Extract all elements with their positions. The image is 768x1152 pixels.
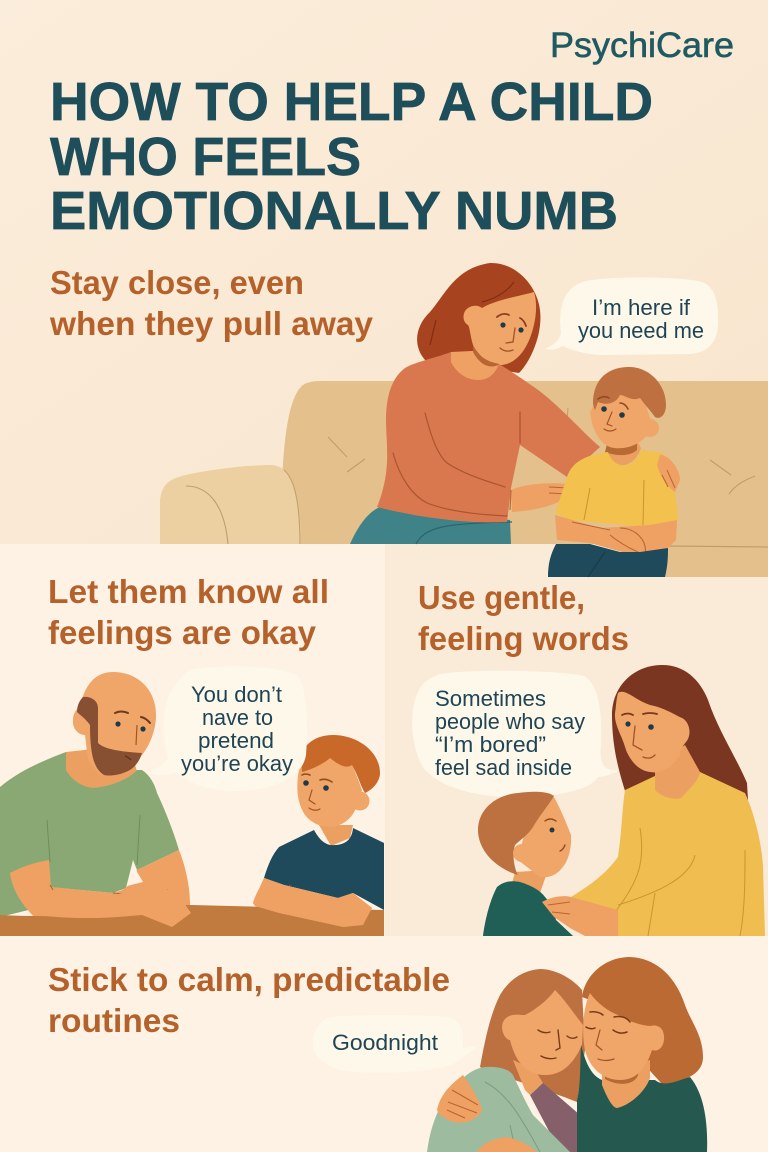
- speech bubble: sometimes people: [412, 671, 618, 797]
- mother in teal: [577, 957, 707, 1152]
- speech bubble: goodnight: [313, 1015, 478, 1073]
- heading: let them know: [48, 573, 329, 651]
- panel: calm routines: [48, 957, 707, 1152]
- speech bubble: sometimes people: people who say: [435, 709, 585, 734]
- speech bubble: goodnight: Goodnight: [332, 1030, 438, 1055]
- sofa: [160, 381, 768, 577]
- heading: stay close: [49, 264, 374, 342]
- heading: let them know: feelings are okay: [48, 614, 317, 651]
- speech bubble: I'm here if you need me: you need me: [578, 318, 704, 343]
- panel: let them know: [0, 573, 384, 936]
- speech bubble: sometimes people: Sometimes: [435, 686, 546, 711]
- title: HOW TO HELP A CHILD: [50, 72, 653, 132]
- panel: use gentle words: [412, 579, 765, 936]
- speech bubble: I'm here if you need me: [545, 277, 718, 355]
- heading: use gentle: Use gentle,: [418, 579, 585, 616]
- boy's forearm on table: [253, 878, 372, 927]
- gap between man's arm and body: [127, 865, 143, 886]
- brand logo: PsychiCare: [550, 26, 734, 65]
- boy in yellow shirt: [548, 367, 680, 577]
- speech bubble: I'm here if you need me: I’m here if: [592, 295, 691, 320]
- speech bubble: you don't have to pretend: you’re okay: [181, 751, 293, 776]
- woman in yellow sweater: [571, 665, 765, 936]
- man's hands on table: [37, 890, 191, 927]
- speech bubble: you don't have to pretend: You don’t: [191, 682, 282, 707]
- heading: stick to routines: [48, 961, 450, 1039]
- man in green shirt: [0, 672, 191, 927]
- heading: use gentle: [418, 579, 629, 657]
- heading: stay close: when they pull away: [49, 305, 374, 342]
- boy in green shirt: [478, 792, 573, 936]
- heading: stay close: Stay close, even: [50, 264, 304, 301]
- heading: stick to routines: Stick to calm, predictable: [48, 961, 450, 998]
- heading: use gentle: feeling words: [418, 620, 629, 657]
- heading: let them know: Let them know all: [48, 573, 329, 610]
- title: EMOTIONALLY NUMB: [50, 181, 618, 241]
- panel: stay close: [49, 263, 768, 577]
- title: WHO FEELS: [50, 127, 361, 187]
- page background: [0, 0, 768, 544]
- speech bubble: you don't have to pretend: [148, 666, 307, 791]
- heading: stick to routines: routines: [48, 1002, 180, 1039]
- panel 3 background: [385, 544, 768, 936]
- panel 4 background: [0, 936, 768, 1152]
- boy in navy shirt: [253, 735, 384, 927]
- woman in orange sweater: [350, 263, 600, 544]
- girl with blanket: [427, 969, 585, 1152]
- panel 2 background: [0, 544, 385, 936]
- speech bubble: sometimes people: “I’m bored”: [435, 732, 546, 757]
- speech bubble: sometimes people: feel sad inside: [435, 755, 572, 780]
- speech bubble: you don't have to pretend: pretend: [198, 728, 274, 753]
- woman's hand on boy's shoulder: [542, 896, 618, 936]
- table: [0, 905, 384, 936]
- title: [50, 72, 653, 241]
- speech bubble: you don't have to pretend: nave to: [202, 705, 273, 730]
